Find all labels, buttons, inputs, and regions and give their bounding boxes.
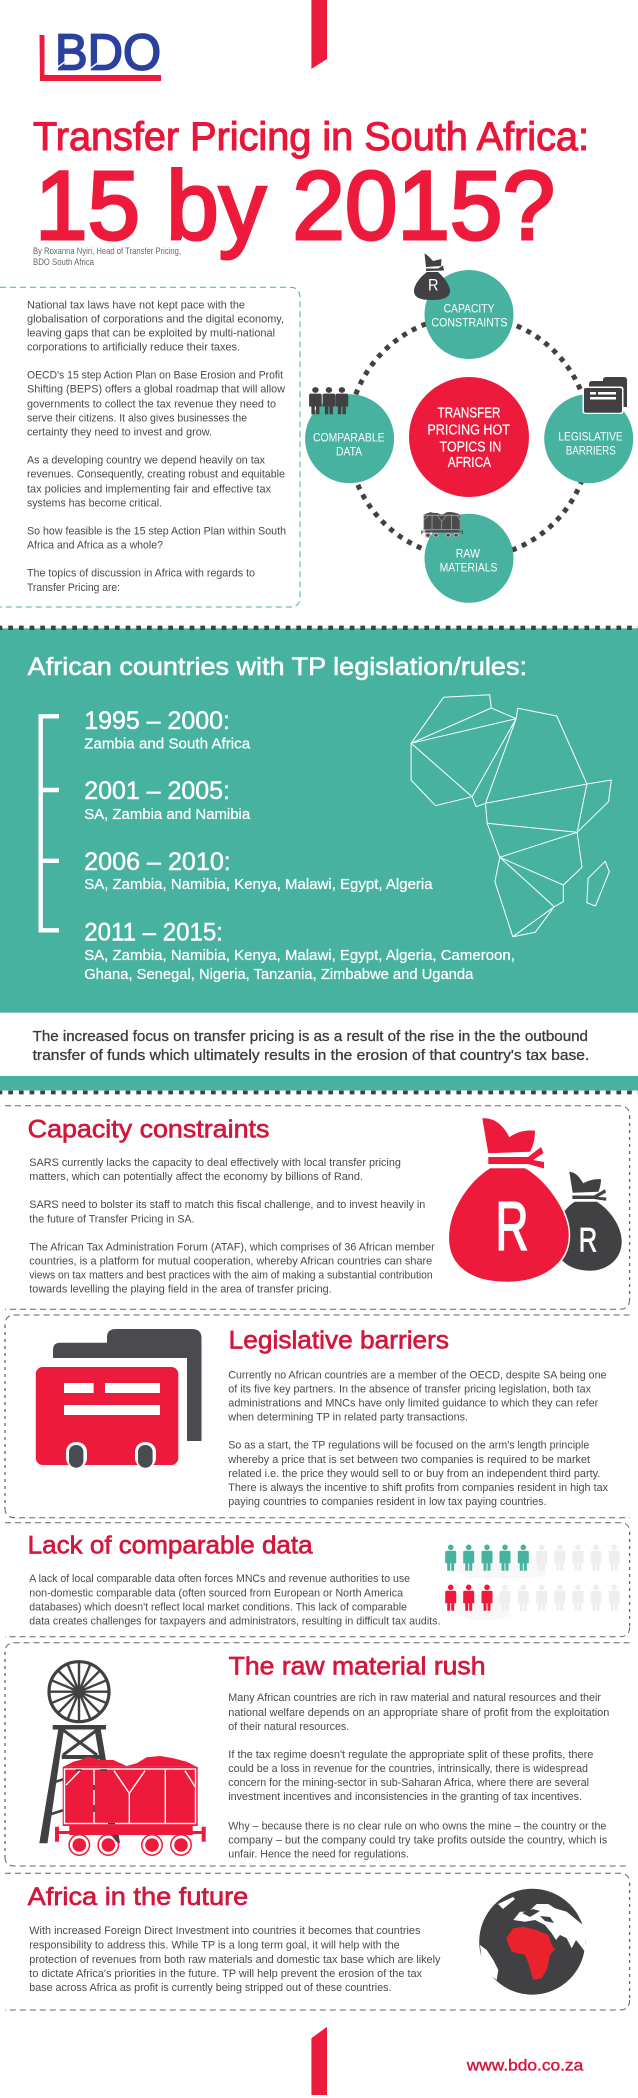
timeline entry 1995-2000: Zambia and South Africa — [84, 735, 251, 752]
heading: Lack of comparable data — [28, 1531, 313, 1559]
node: raw materials — [424, 514, 514, 603]
icon: globe with Africa highlighted — [479, 1889, 585, 1995]
node: capacity constraints: CONSTRAINTS — [431, 317, 508, 329]
footer: website address: www.bdo.co.za — [466, 2058, 583, 2075]
teal divider band — [0, 1076, 638, 1092]
timeline entry 2011-2015 — [84, 919, 515, 983]
body text: A lack of local comparable data often forces MNCs and revenue authorities to use — [29, 1573, 410, 1585]
body text: national welfare depends on an appropriate share of profit from the exploitation — [228, 1707, 609, 1719]
icon: money bags: R — [496, 1187, 528, 1264]
statement text: The increased focus on transfer pricing is as a result of the rise in the the outbound — [33, 1029, 588, 1045]
intro text: corporations to artificially reduce their taxes. — [27, 342, 240, 354]
body text: administrations and MNCs have only limited guidance to which they can refer — [228, 1397, 598, 1409]
panel: legislative barriers — [5, 1315, 630, 1518]
node: legislative barriers — [544, 394, 633, 483]
body text: unfair. Hence the need for regulations. — [228, 1848, 409, 1860]
body text: The African Tax Administration Forum (ATAF), which comprises of 36 African member — [29, 1242, 435, 1254]
body text: With increased Foreign Direct Investment into countries it becomes that countries — [29, 1925, 421, 1937]
panel: capacity constraints — [5, 1106, 630, 1309]
node: comparable data: DATA — [336, 446, 362, 458]
intro text: National tax laws have not kept pace with the — [27, 299, 245, 311]
intro text: certainty they need to invest and grow. — [27, 427, 212, 439]
body text: base across Africa as profit is currently being stripped out of these countries. — [29, 1982, 392, 1994]
icon: small money bag — [414, 254, 450, 300]
body text: towards levelling the playing field in the area of transfer pricing. — [29, 1284, 332, 1296]
intro text: governments to collect the tax revenue they need to — [27, 398, 276, 410]
body text: There is always the incentive to shift profits from companies resident in high tax — [228, 1482, 608, 1494]
body text: Why – because there is no clear rule on who owns the mine – the country or the — [228, 1820, 606, 1832]
intro text: OECD's 15 step Action Plan on Base Erosion and Profit — [27, 370, 284, 382]
body text: views on tax matters and best practices with the aim of making a substantial contribution — [29, 1270, 433, 1282]
timeline bracket — [41, 716, 59, 930]
footer: bottom red marker — [311, 2027, 327, 2095]
byline: By Roxanna Nyiri, Head of Transfer Pricing, — [33, 246, 181, 256]
BDO logo: BDO — [55, 24, 161, 80]
centre circle: transfer pricing hot topics: TRANSFER — [438, 404, 501, 421]
body text: whereby a price that is set between two companies is required to be market — [227, 1454, 591, 1466]
heading: Africa in the future — [28, 1883, 248, 1911]
intro text: tax policies and implementing fair and effective tax — [27, 483, 271, 495]
icon: money bags: R — [579, 1222, 597, 1260]
body text: to dictate Africa's priorities in the future. TP will help prevent the erosion of the tax — [29, 1968, 422, 1980]
byline: BDO South Africa — [33, 257, 95, 267]
node: comparable data — [305, 394, 394, 483]
body text — [228, 1692, 609, 1860]
statement text — [33, 1029, 589, 1064]
panel: lack of comparable data — [5, 1523, 630, 1637]
intro text: The topics of discussion in Africa with regards to — [27, 567, 255, 579]
icon: three people — [309, 387, 348, 414]
icon: mine headframe — [39, 1662, 120, 1843]
body text: concern for the mining-sector in sub-Saharan Africa, where there are several — [228, 1777, 589, 1789]
intro text: revenues. Consequently, creating robust and equitable — [27, 469, 285, 481]
timeline entry 2006-2010: SA, Zambia, Namibia, Kenya, Malawi, Egypt, Algeria — [84, 876, 433, 893]
title: 15 by 2015? — [35, 151, 555, 260]
small dark money bag — [555, 1172, 622, 1271]
header bar: top red marker — [311, 0, 327, 69]
node: legislative barriers: LEGISLATIVE — [558, 431, 623, 443]
chart: hot topics ring diagram — [305, 254, 633, 603]
body text: databases) which doesn't reflect local market conditions. This lack of comparable — [29, 1602, 407, 1614]
panel: introduction — [0, 287, 300, 607]
body text: paying countries to companies resident in low tax paying countries. — [228, 1496, 547, 1508]
intro text: As a developing country we depend heavily on tax — [27, 455, 265, 467]
timeline entry 2011-2015: Ghana, Senegal, Nigeria, Tanzania, Zimbabwe and Uganda — [84, 966, 474, 983]
pictogram: teal people row — [445, 1544, 620, 1578]
body text: protection of revenues from both raw materials and domestic tax base which are likely — [29, 1954, 441, 1966]
body text: Many African countries are rich in raw material and natural resources and their — [228, 1692, 601, 1704]
pictogram: red people row — [445, 1584, 620, 1620]
intro text: Africa and Africa as a whole? — [27, 539, 163, 551]
intro text: Shifting (BEPS) offers a global roadmap that will allow — [27, 384, 286, 396]
large red money bag — [448, 1118, 570, 1282]
body text: investment incentives and inconsistencies in the granting of tax incentives. — [228, 1791, 582, 1803]
timeline entry 2011-2015: 2011 – 2015: — [84, 919, 223, 947]
heading: Capacity constraints — [28, 1116, 269, 1144]
body text — [29, 1573, 440, 1628]
intro text: leaving gaps that can be exploited by multi-national — [27, 328, 275, 340]
intro text: So how feasible is the 15 step Action Plan within South — [27, 525, 286, 537]
panel: African countries with TP legislation — [0, 628, 638, 1013]
body text: when determining TP in related party transactions. — [227, 1411, 468, 1423]
timeline entry 2001-2005: 2001 – 2005: — [84, 777, 230, 805]
centre circle: transfer pricing hot topics: PRICING HOT — [427, 421, 510, 438]
intro text: globalisation of corporations and the digital economy, — [27, 313, 284, 325]
icon: folders — [32, 1329, 202, 1469]
body text: If the tax regime doesn't regulate the appropriate split of these profits, there — [228, 1749, 593, 1761]
timeline entry 2006-2010 — [84, 848, 433, 893]
timeline entry 2011-2015: SA, Zambia, Namibia, Kenya, Malawi, Egypt, Algeria, Cameroon, — [84, 947, 515, 964]
timeline entry 2001-2005: SA, Zambia and Namibia — [84, 806, 251, 823]
timeline entry 1995-2000: 1995 – 2000: — [84, 707, 230, 735]
body text: related i.e. the price they would sell to or buy from an independent third party. — [228, 1468, 600, 1480]
node: comparable data: COMPARABLE — [313, 432, 385, 444]
intro text: Transfer Pricing are: — [27, 582, 120, 594]
icon: small coal wagon — [421, 512, 463, 538]
body text: the future of Transfer Pricing in SA. — [29, 1214, 194, 1226]
centre circle: transfer pricing hot topics: AFRICA — [448, 454, 491, 471]
icon: coal wagon — [55, 1756, 206, 1855]
intro text — [27, 299, 286, 594]
body text: of their natural resources. — [228, 1721, 349, 1733]
byline — [33, 246, 181, 267]
body text: data creates challenges for taxpayers and administrators, resulting in difficult tax audits. — [29, 1616, 440, 1628]
icon: small money bag: R — [428, 276, 438, 294]
timeline entry 1995-2000 — [84, 707, 251, 752]
body text: could be a loss in revenue for the countries, intrinsically, there is widespread — [228, 1763, 588, 1775]
title: Transfer Pricing in South Africa: — [33, 115, 589, 159]
heading: The raw material rush — [229, 1652, 485, 1680]
body text: So as a start, the TP regulations will be focused on the arm's length principle — [228, 1439, 589, 1451]
body text: Currently no African countries are a member of the OECD, despite SA being one — [228, 1369, 606, 1381]
body text: non-domestic comparable data (often sourced from European or North America — [29, 1588, 404, 1600]
statement text: transfer of funds which ultimately results in the erosion of that country's tax base. — [33, 1048, 589, 1064]
body text — [227, 1369, 608, 1508]
node: raw materials: MATERIALS — [440, 562, 498, 574]
body text — [29, 1157, 435, 1296]
body text: of its five key partners. In the absence of transfer pricing legislation, both tax — [228, 1383, 591, 1395]
panel: Africa in the future — [5, 1873, 630, 2010]
node: capacity constraints: CAPACITY — [444, 303, 495, 315]
heading: African countries with TP legislation/rules: — [28, 653, 527, 681]
centre circle: transfer pricing hot topics — [409, 377, 529, 497]
panel: the raw material rush — [5, 1643, 630, 1866]
body text: company – but the company could try take profits outside the country, which is — [228, 1834, 607, 1846]
timeline entry 2006-2010: 2006 – 2010: — [84, 848, 231, 876]
icon: money bags — [448, 1118, 622, 1282]
heading: Legislative barriers — [229, 1326, 449, 1354]
node: raw materials: RAW — [456, 548, 480, 560]
centre circle: transfer pricing hot topics: TOPICS IN — [440, 438, 501, 455]
map: polygonal Africa outline — [411, 695, 611, 937]
intro text: serve their citizens. It also gives businesses the — [27, 412, 247, 424]
body text: SARS need to bolster its staff to match this fiscal challenge, and to invest heavily in — [29, 1199, 425, 1211]
Africa shape — [506, 1927, 556, 1980]
node: legislative barriers: BARRIERS — [566, 445, 616, 457]
icon: small folders — [582, 377, 627, 414]
body text — [29, 1925, 441, 1994]
intro text: systems has become critical. — [27, 497, 162, 509]
body text: countries, is a platform for mutual cooperation, whereby African countries can share — [29, 1256, 432, 1268]
body text: responsibility to address this. While TP is a long term goal, it will help with the — [29, 1940, 400, 1952]
timeline entry 2001-2005 — [84, 777, 251, 823]
body text: SARS currently lacks the capacity to deal effectively with local transfer pricing — [29, 1157, 401, 1169]
body text: matters, which can potentially affect the economy by billions of Rand. — [29, 1171, 363, 1183]
node: capacity constraints — [424, 270, 514, 359]
